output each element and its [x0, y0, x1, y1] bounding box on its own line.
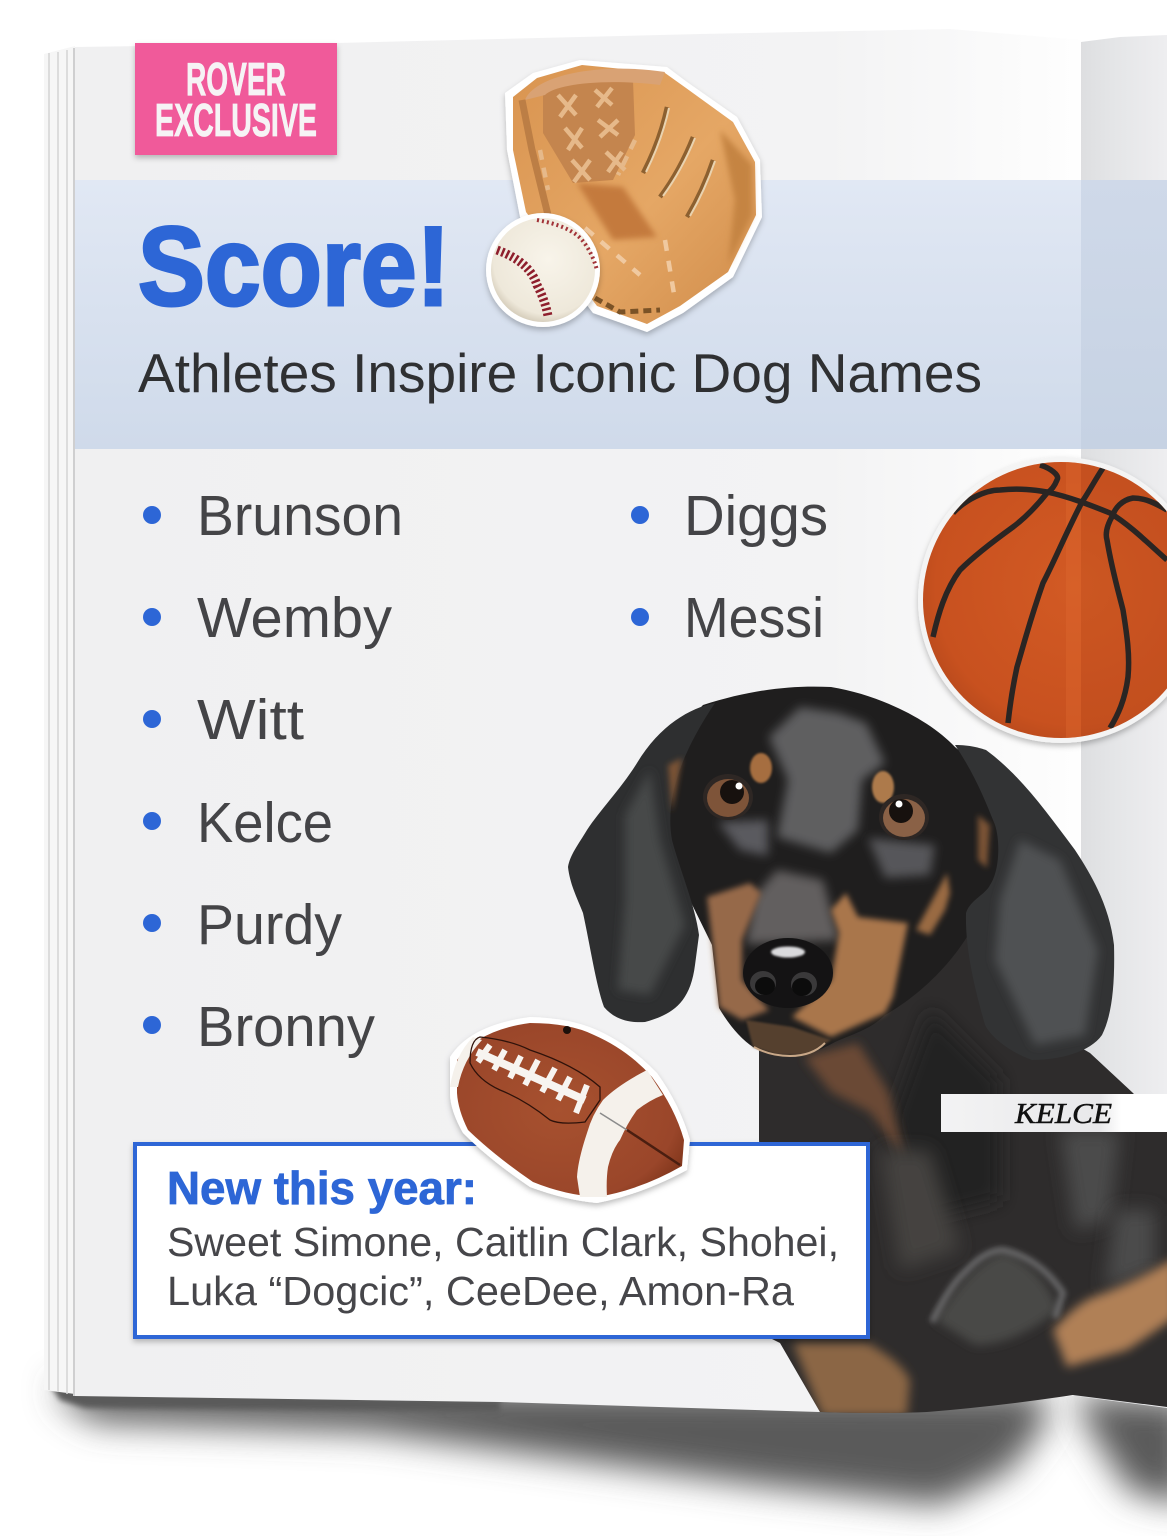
- list: dog names column two: Messi: [684, 586, 824, 650]
- glove lacing: [540, 88, 675, 300]
- badge: rover exclusive: ROVER: [186, 53, 286, 105]
- dog foreleg tan patch: [1053, 1258, 1167, 1367]
- stacked page edges: [44, 46, 75, 1396]
- list: dog names column one: Brunson: [197, 484, 403, 548]
- icon: basketball: [918, 457, 1167, 743]
- list: dog names column two: Diggs: [684, 484, 828, 548]
- glove palm: [577, 183, 657, 240]
- callout: new this year: [135, 1144, 868, 1337]
- football laces: [477, 1045, 587, 1113]
- badge: rover exclusive: [135, 43, 337, 155]
- callout: new this year: Luka “Dogcic”, CeeDee, Amon-Ra: [167, 1268, 794, 1314]
- icon: baseball: [486, 213, 600, 327]
- blue title banner: [75, 180, 1167, 449]
- football lace panel: [470, 1037, 600, 1123]
- caption: kelce: [941, 1094, 1167, 1132]
- caption: kelce: KELCE: [1014, 1098, 1112, 1130]
- photo: dachshund: [568, 687, 1167, 1416]
- dog right muzzle fur: [792, 893, 908, 1037]
- icon: american football: [450, 1017, 690, 1203]
- dog eye right: [879, 794, 929, 840]
- list: dog names column one: Purdy: [197, 893, 342, 957]
- left page: [75, 29, 1081, 1412]
- dog shoulder fur: [935, 1252, 1058, 1345]
- dog body: [759, 900, 1167, 1416]
- icon: baseball glove: [505, 60, 762, 332]
- dog snout bridge: [746, 870, 839, 944]
- glove webbing: [543, 80, 635, 183]
- list: dog names column one: Witt: [197, 688, 304, 752]
- cast shadow under the magazine: [50, 1385, 1167, 1505]
- dog cheek fur: [916, 873, 950, 935]
- subtitle: Athletes Inspire Iconic Dog Names: [138, 342, 982, 404]
- dog chest tan patch: [793, 1343, 910, 1416]
- football white stripes: [577, 1070, 663, 1197]
- dog nose: [743, 938, 833, 1008]
- callout: new this year: New this year:: [167, 1162, 477, 1214]
- dog left muzzle fur: [707, 883, 769, 1020]
- badge: rover exclusive: EXCLUSIVE: [155, 94, 317, 146]
- list: dog names column one: Wemby: [197, 586, 393, 650]
- right page: [1075, 35, 1167, 1408]
- dog right ear: [955, 745, 1114, 1060]
- dog forehead grey patch: [769, 707, 885, 853]
- dog chin: [746, 1020, 831, 1055]
- list: dog names column one: [143, 484, 403, 1059]
- dog eyebrows: [750, 753, 772, 783]
- list: dog names column two: [631, 484, 828, 650]
- dog left ear: [568, 703, 715, 1022]
- callout: new this year: Sweet Simone, Caitlin Clark, Shohei,: [167, 1219, 839, 1265]
- list: dog names column one: Bronny: [197, 995, 375, 1059]
- list: dog names column one: Kelce: [197, 791, 333, 855]
- title: Score!: [138, 204, 450, 329]
- dog eye left: [703, 774, 753, 820]
- dog head: [645, 687, 1006, 1056]
